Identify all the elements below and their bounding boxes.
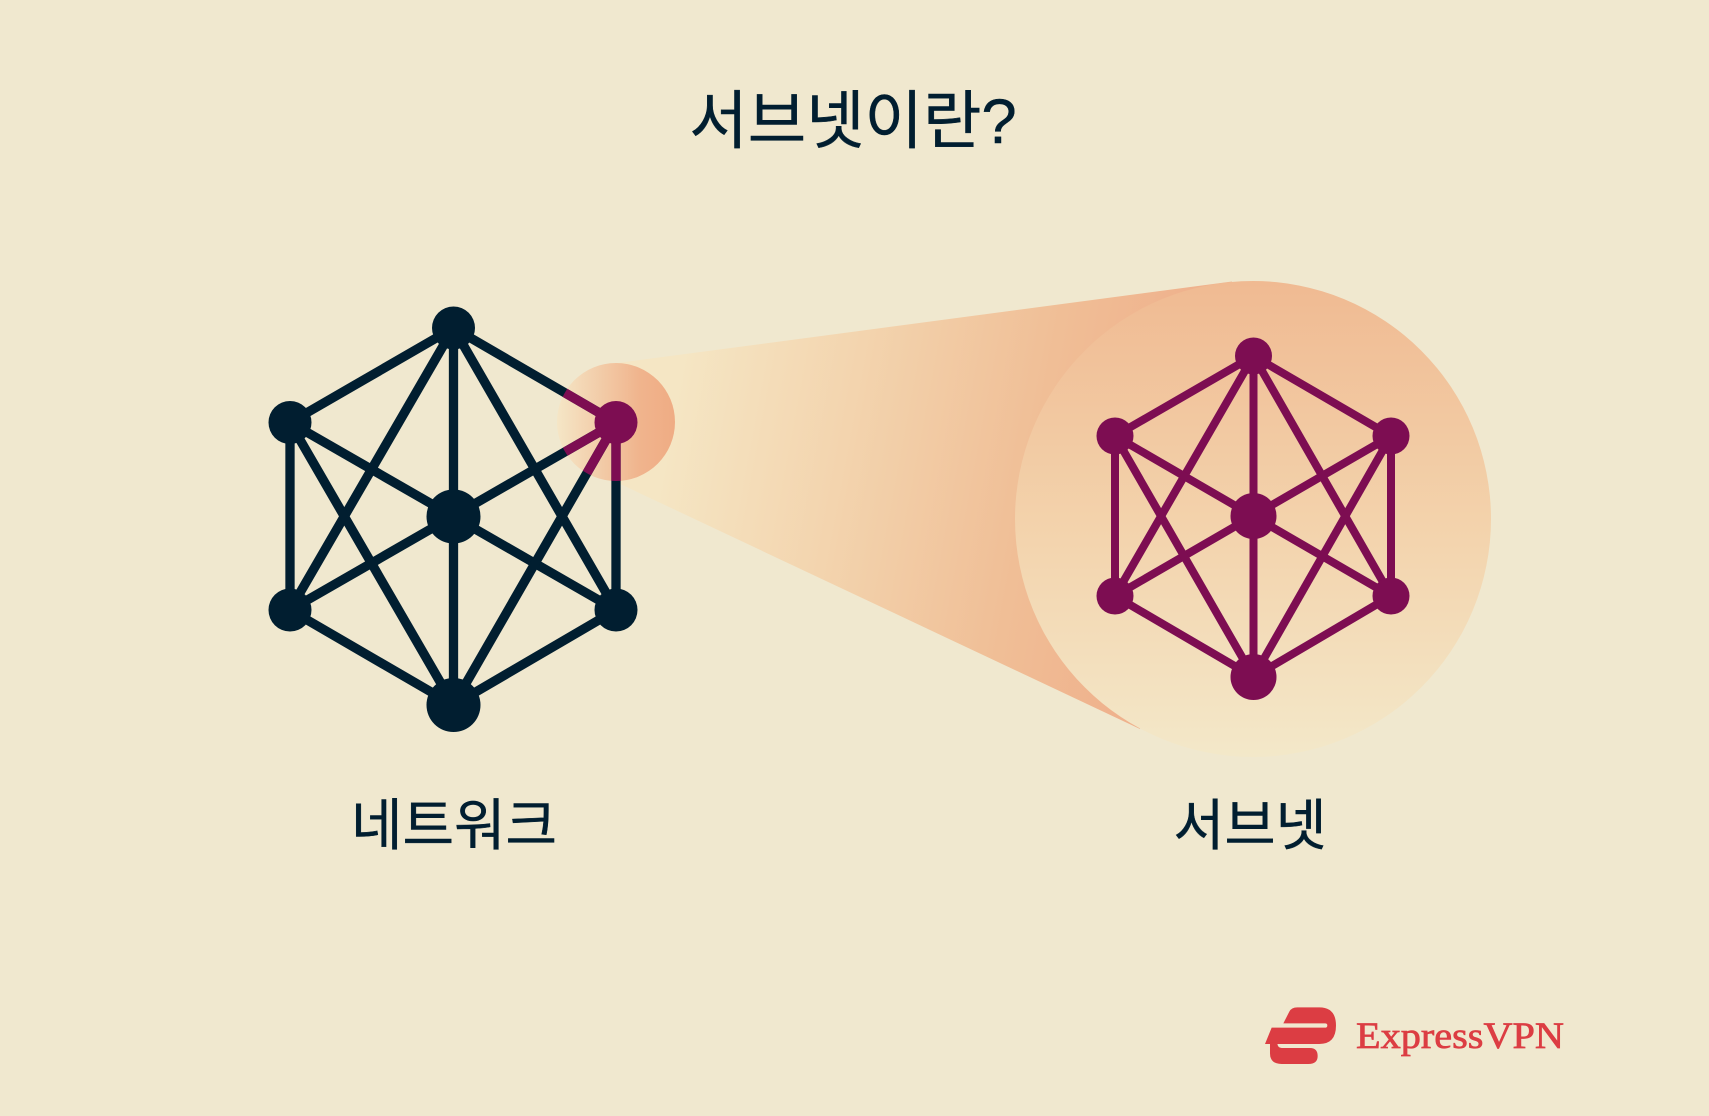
network diagram	[268, 306, 638, 732]
label: network: 네트워크	[351, 794, 557, 857]
subnet circle	[1015, 281, 1491, 757]
subnet diagram	[1096, 338, 1410, 700]
wordmark: ExpressVPN	[1356, 1015, 1564, 1056]
title: 서브넷이란?	[689, 87, 1017, 157]
logo: ExpressVPN	[1265, 1007, 1564, 1064]
zoom beam	[616, 282, 1232, 729]
magnifier circle	[557, 363, 675, 481]
highlighted node and links	[562, 388, 638, 481]
label: subnet: 서브넷	[1173, 795, 1327, 857]
icon: ExpressVPN mark	[1265, 1007, 1336, 1064]
